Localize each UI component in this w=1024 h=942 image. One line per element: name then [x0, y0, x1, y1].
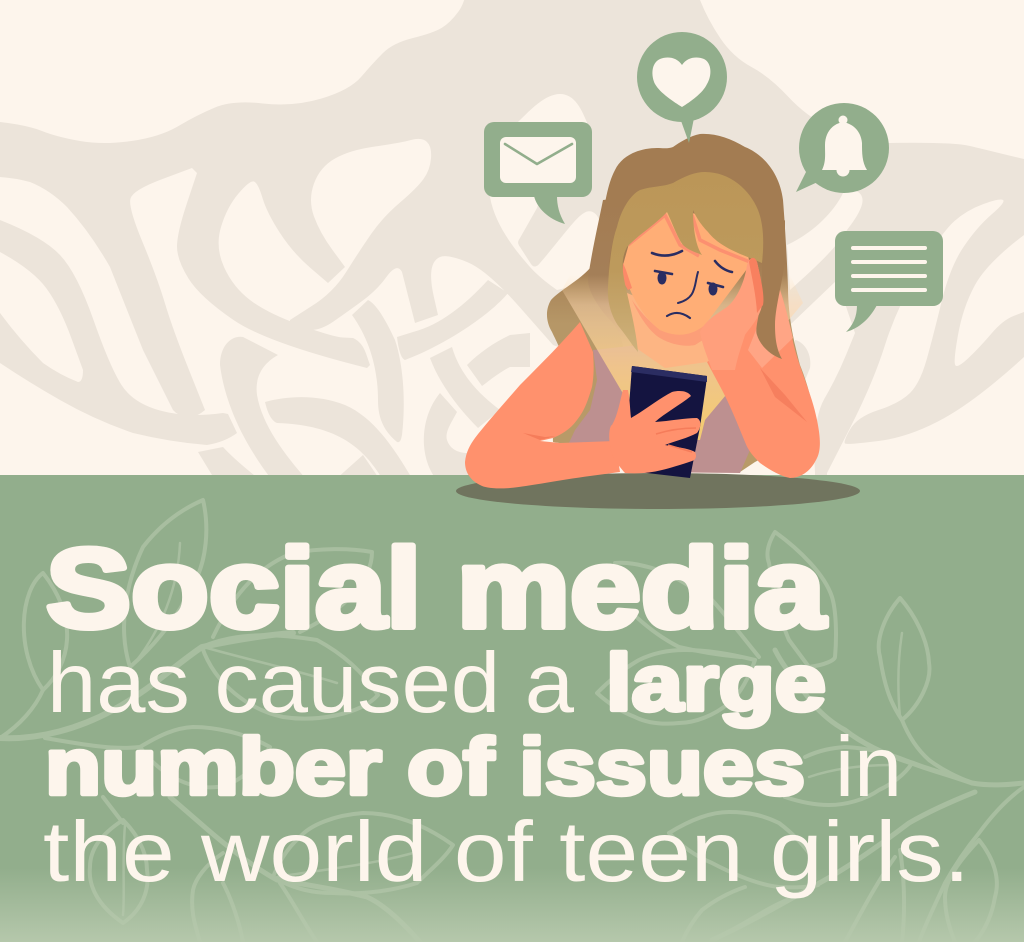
left arm	[465, 322, 620, 488]
headline: the world of teen girls.	[43, 805, 970, 900]
ear shadow	[622, 263, 632, 290]
icon: envelope bubble	[484, 122, 592, 224]
phone	[628, 366, 707, 478]
icon: bell bubble	[796, 103, 889, 193]
hair shadow on forehead	[628, 215, 750, 262]
headline: number of issues	[45, 722, 805, 811]
face	[623, 205, 750, 335]
tank top	[568, 340, 760, 473]
front hair and bangs	[608, 172, 763, 352]
headline: large	[606, 638, 826, 727]
left hair strand	[588, 197, 631, 367]
facial features	[652, 251, 732, 318]
illustration: sad girl with phone	[465, 134, 820, 488]
back hair	[547, 134, 815, 472]
headline: has caused a	[47, 636, 575, 731]
desk shadow	[456, 473, 860, 509]
icon: heart bubble	[637, 32, 727, 143]
hand holding phone	[609, 390, 700, 473]
headline	[43, 526, 970, 900]
hair over arm	[756, 220, 785, 359]
green table panel	[0, 475, 1024, 942]
leaf line-art pattern	[0, 500, 1024, 942]
finger creases	[656, 428, 696, 452]
arm crease	[760, 368, 807, 422]
bottom fade	[0, 868, 1024, 942]
phone light cone	[562, 275, 803, 440]
neck shadow	[632, 300, 706, 346]
palm edge	[749, 258, 763, 313]
headline: in	[835, 720, 902, 815]
neck	[627, 293, 738, 368]
lit area on right arm	[748, 290, 793, 368]
hand on cheek	[700, 258, 763, 370]
background: abstract organic shapes	[0, 0, 1024, 490]
page background	[0, 0, 1024, 475]
right arm	[707, 290, 820, 478]
headline: Social media	[46, 526, 826, 651]
phone top edge	[631, 366, 707, 382]
elbow crease	[523, 433, 556, 440]
icon: message bubble	[835, 231, 943, 332]
